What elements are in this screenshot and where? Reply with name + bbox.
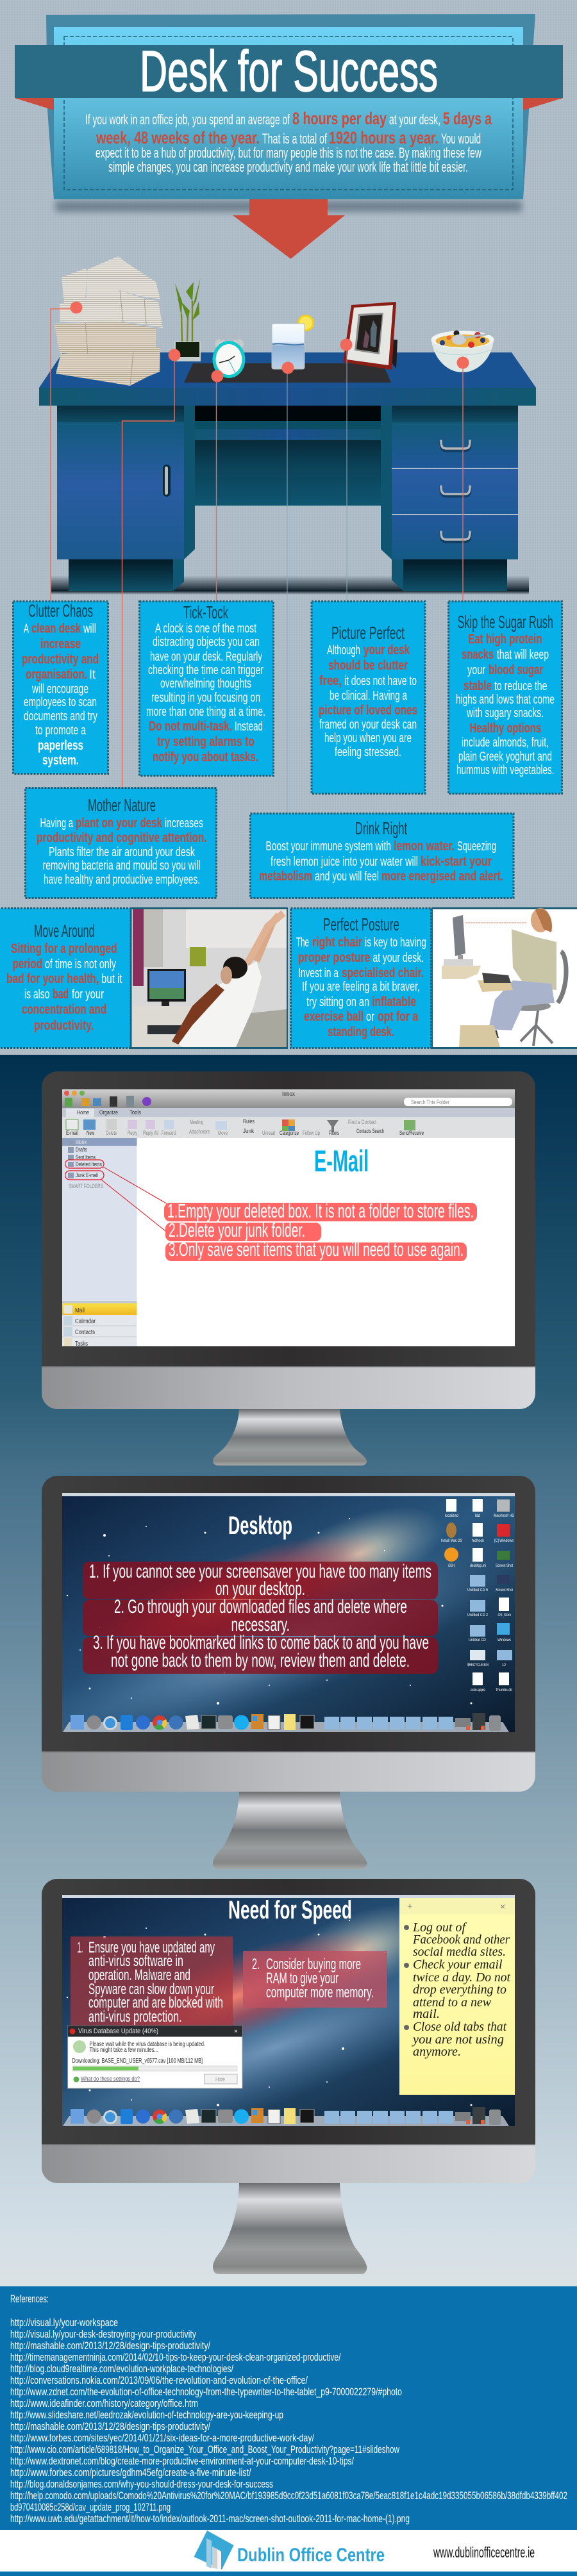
panel: Drink Right — [250, 814, 514, 898]
desktop icons: .DS_Store — [498, 1614, 511, 1617]
body: It — [89, 668, 96, 682]
reference list: http://www.cio.com/article/689818/How_to_Organize_Your_Office_and_Boost_Your_Productivity?page=11#slideshow — [10, 2443, 399, 2456]
panel: Perfect Posture — [291, 909, 431, 1048]
desk — [39, 352, 536, 595]
body: more than one thing at a time. — [146, 705, 265, 719]
desktop icons — [441, 1499, 515, 1692]
glass of lemon water — [272, 315, 314, 369]
section title: E-Mail — [314, 1144, 369, 1178]
body: The — [296, 936, 309, 950]
body: metabolism — [259, 869, 312, 884]
body: framed on your desk can — [319, 718, 417, 732]
sticky note: mail. — [413, 2007, 440, 2021]
desk mat — [184, 363, 391, 383]
monitor: email — [42, 1071, 535, 1466]
virus update dialog: Downloading: BASE_END_USER_v6577.cav [100 MB/112 MB] — [72, 2058, 203, 2065]
body: system. — [42, 753, 79, 768]
body — [37, 816, 207, 887]
tip 1: computer and are blocked with — [88, 1994, 223, 2011]
desktop icons: Macintosh HD — [494, 1514, 515, 1518]
tip 3 — [83, 1632, 438, 1674]
tip 1: on your desktop. — [215, 1578, 305, 1599]
centre recess — [184, 406, 391, 506]
body: Eat high protein — [468, 632, 542, 647]
company name: Dublin Office Centre — [237, 2545, 385, 2566]
body: it does not have to — [344, 674, 417, 688]
body: Boost your immune system with — [265, 839, 391, 854]
desktop icons: Install Mac OS — [441, 1539, 462, 1543]
body: Sitting for a prolonged — [11, 941, 117, 956]
ribbon: Reply — [128, 1130, 137, 1136]
ribbon: New — [87, 1130, 94, 1136]
body: blood sugar — [489, 663, 543, 677]
desktop screen — [62, 1895, 515, 2126]
tip 2 — [83, 1596, 438, 1636]
ribbon: Filters — [329, 1130, 339, 1136]
body: lemon water. — [394, 839, 455, 854]
body: be clinical. Having a — [330, 689, 408, 703]
tip 2: computer more memory. — [266, 1984, 374, 2001]
ribbon: Follow Up — [303, 1130, 320, 1136]
body: If you are feeling a bit braver, — [302, 980, 420, 994]
ribbon — [62, 1117, 515, 1138]
body: A clock is one of the most — [155, 622, 256, 636]
panel: Picture Perfect — [312, 601, 425, 793]
red highlight ovals — [65, 1160, 104, 1180]
tabs: Organize — [99, 1109, 118, 1116]
heading: Mother Nature — [88, 795, 156, 815]
arrow — [233, 199, 345, 259]
section title: Desktop — [228, 1512, 292, 1540]
tip 1: Ensure you have updated any — [88, 1939, 215, 1956]
marker dots — [71, 301, 469, 382]
body: have healthy and productive employees. — [44, 873, 200, 887]
body: organisation. — [26, 667, 87, 682]
body: employees to scan — [24, 695, 97, 709]
sticky note: you are not using — [412, 2033, 504, 2047]
body: resulting in you focusing on — [151, 691, 260, 705]
reference list: http://timemanagementninja.com/2014/02/10-tips-to-keep-your-desk-clean-organized-productive/ — [10, 2351, 341, 2363]
body: notify you about tasks. — [153, 750, 258, 764]
ribbon: Send/Receive — [399, 1130, 424, 1136]
right pedestal — [381, 406, 518, 559]
title: Desk for Success — [140, 40, 438, 104]
sticky note: twice a day. Do not — [413, 1970, 510, 1985]
body: should be clutter — [328, 658, 408, 673]
reference list: http://www.uwb.edu/getattachment/it/how-to/index/outlook-2011-mac/screen-shot-outlook-2011-for-mac-home-(1).png — [10, 2513, 410, 2525]
desktop icons: hidhook — [472, 1539, 485, 1543]
ribbon: Reply All — [143, 1130, 158, 1136]
heading: Move Around — [34, 921, 95, 941]
sticky note: anymore. — [413, 2045, 461, 2059]
body: right chair — [312, 935, 362, 950]
reference list: http://www.forbes.com/sites/yec/2014/01/21/six-ideas-for-a-more-productive-work-day/ — [10, 2432, 314, 2444]
body: distracting objects you can — [153, 635, 260, 649]
body: opt for a — [378, 1009, 418, 1024]
body — [259, 839, 503, 884]
body: snacks — [462, 647, 494, 662]
body: plant on your desk — [76, 816, 162, 830]
window title bar: Inbox — [282, 1091, 295, 1097]
body — [296, 935, 426, 1039]
tip 1 — [71, 1936, 233, 2026]
sidebar: Contacts — [75, 1329, 95, 1336]
sidebar: Junk E-mail — [76, 1172, 98, 1178]
left pedestal — [57, 406, 195, 559]
cereal bowl — [431, 331, 508, 372]
body — [6, 941, 122, 1033]
sidebar: Calendar — [75, 1318, 96, 1325]
window title bar: Search This Folder — [411, 1099, 449, 1105]
body: productivity and cognitive attention. — [37, 830, 207, 845]
outlook screen — [62, 1089, 515, 1348]
dock — [63, 1713, 509, 1732]
sticky note: Check your email — [413, 1958, 503, 1972]
heading: Tick-Tock — [183, 602, 229, 622]
body: your desk — [364, 643, 410, 657]
body: try setting alarms to — [157, 734, 255, 749]
leader lines — [51, 309, 463, 813]
tip 1: 1. — [77, 1939, 83, 1956]
intro text: 5 days a — [443, 109, 492, 128]
body: will encourage — [31, 682, 88, 697]
keyboard and footrest — [459, 973, 513, 1047]
desktop icons: .com.apple — [470, 1688, 486, 1692]
tabs: Home — [77, 1109, 89, 1116]
sidebar: SMART FOLDERS — [69, 1183, 103, 1189]
tip 1: anti-virus protection. — [88, 2008, 182, 2026]
ribbon: Categorize — [280, 1130, 299, 1136]
virus update dialog: Please wait while the virus database is being updated. — [90, 2041, 205, 2048]
tip 2: 2. — [252, 1956, 260, 1973]
ribbon: Contacts Search — [356, 1128, 384, 1134]
body: increase — [40, 637, 81, 652]
ribbon: E-mail — [66, 1130, 78, 1136]
chair — [508, 952, 566, 1046]
ribbon: Move — [218, 1130, 228, 1136]
desktop icons: Untitled CD — [469, 1639, 487, 1642]
panel shadow — [55, 201, 522, 212]
body: will — [83, 622, 96, 636]
panel: Tick-Tock — [140, 601, 273, 775]
body: more energised and alert. — [381, 869, 503, 884]
body: stable — [464, 679, 492, 693]
tip 2: Consider buying more — [266, 1956, 361, 1973]
ribbon: Unread — [262, 1130, 275, 1136]
footer — [0, 2530, 577, 2576]
body: removing bacteria and mould so you will — [43, 859, 201, 873]
body: picture of loved ones — [319, 703, 417, 718]
desktop icons: Untitled CD 5 — [467, 1589, 489, 1592]
reference list: http://www.ideafinder.com/history/category/office.htm — [10, 2397, 198, 2409]
tip 2 — [243, 1951, 387, 2008]
reference list: http://www.dextronet.com/blog/create-more-productive-environment-at-your-computer-desk-10-tips/ — [10, 2455, 354, 2467]
reference list: http://mashable.com/2013/12/28/design-tips-productivity/ — [10, 2420, 210, 2432]
desktop icons: Screen Shot — [496, 1564, 513, 1568]
body: that will keep — [497, 648, 549, 662]
heading: Perfect Posture — [323, 914, 399, 934]
body: try sitting on an — [306, 995, 369, 1009]
ribbon: Rules — [243, 1118, 255, 1125]
intro text: week, 48 weeks of the year. — [96, 128, 260, 147]
reference list: http://blog.donaldsonjames.com/why-you-should-dress-your-desk-for-success — [10, 2478, 273, 2490]
sidebar: Sent Items — [76, 1154, 96, 1160]
references heading: References: — [10, 2293, 49, 2305]
plant — [174, 277, 201, 361]
sticky note: Facebook and other — [412, 1933, 510, 1947]
reference list: http://www.forbes.com/pictures/gdhm45efg/create-a-five-minute-list/ — [10, 2466, 251, 2479]
tip 3: not gone back to them by now, review them and delete. — [111, 1650, 410, 1671]
body: standing desk. — [328, 1025, 394, 1039]
tip 2: 2. Go through your downloaded files and delete where — [114, 1596, 407, 1617]
body: free, — [319, 673, 342, 688]
legs — [69, 559, 507, 591]
drawer handles — [441, 441, 470, 541]
tip 2: 2.Delete your junk folder. — [169, 1219, 305, 1241]
tabs: Tools — [130, 1109, 141, 1116]
reference list: http://conversations.nokia.com/2013/09/06/the-revolution-and-evolution-of-the-office/ — [10, 2374, 308, 2386]
sidebar: Deleted Items — [76, 1161, 102, 1168]
body: but it — [101, 972, 122, 986]
desktop icons: Screen Shot — [496, 1589, 513, 1592]
heading: Clutter Chaos — [28, 601, 93, 621]
illustration: correct sitting posture — [431, 907, 577, 1049]
section title: Need for Speed — [228, 1896, 352, 1924]
panel: Move Around — [0, 909, 131, 1048]
body: bad for your health, — [6, 971, 99, 986]
body: exercise ball — [304, 1009, 364, 1024]
reference list: http://visual.ly/your-desk-destroying-your-productivity — [10, 2328, 196, 2340]
heading: Picture Perfect — [331, 623, 405, 643]
desktop icons: Untitled CD 2 — [467, 1614, 489, 1617]
body: paperless — [38, 738, 83, 753]
person — [476, 908, 556, 1047]
body: your — [467, 663, 485, 677]
virus update dialog: Virus Database Update (40%) — [78, 2027, 158, 2035]
desktop screen — [62, 1493, 515, 1732]
body: have on your desk. Regularly — [150, 650, 262, 664]
panel: Skip the Sugar Rush — [449, 601, 562, 793]
tip 2: RAM to give your — [266, 1970, 339, 1987]
header panel — [15, 14, 563, 212]
reference list: http://visual.ly/your-workspace — [10, 2316, 118, 2329]
body: of time is not only — [45, 957, 116, 971]
tip 1: operation. Malware and — [88, 1967, 190, 1984]
sidebar: Tasks — [75, 1341, 88, 1348]
sticky note: social media sites. — [413, 1945, 506, 1959]
sidebar — [62, 1138, 137, 1348]
reference list: http://mashable.com/2013/12/28/design-tips-productivity/ — [10, 2340, 210, 2352]
logo — [194, 2531, 233, 2570]
intro text — [85, 109, 492, 175]
sticky note: + — [407, 1901, 413, 1912]
picture frame — [343, 302, 397, 370]
window title bar — [62, 1089, 515, 1108]
ribbon: Attachment — [189, 1128, 210, 1135]
body: specialised chair. — [342, 966, 424, 980]
desktop surface — [39, 352, 536, 388]
body: checking the time can trigger — [148, 663, 263, 677]
panel: Clutter Chaos — [13, 601, 108, 774]
body: period — [13, 957, 42, 971]
man — [172, 913, 283, 1047]
body: kick-start your — [421, 854, 492, 869]
section background: computer tips — [0, 1055, 577, 2286]
tip 2: necessary. — [231, 1614, 290, 1635]
desktop icons: ldd — [475, 1514, 480, 1518]
sticky note: drop everything to — [413, 1983, 506, 1997]
intro text: If you work in an office job, you spend an average of — [85, 111, 290, 128]
connector lines — [101, 1167, 169, 1234]
paper stack — [54, 256, 163, 386]
sticky note — [399, 1898, 515, 2095]
body: Do not multi-task. — [149, 719, 232, 734]
body: A — [24, 622, 29, 636]
computer — [442, 915, 481, 979]
photo: man stretching at desk — [130, 907, 288, 1049]
body: overwhelming thoughts — [160, 677, 251, 691]
body: proper posture — [298, 950, 371, 965]
virus update dialog — [68, 2026, 242, 2088]
desktop icons: 12 — [502, 1664, 506, 1667]
body: increases — [165, 816, 203, 830]
sticky note: Log out of — [412, 1920, 467, 1935]
body — [456, 632, 555, 777]
sidebar: Inbox — [76, 1139, 87, 1145]
body: help you when you are — [324, 731, 412, 745]
sticky note: Close old tabs that — [413, 2020, 506, 2034]
body: with sugary snacks. — [466, 706, 544, 720]
body: productivity. — [34, 1018, 94, 1033]
body: for your — [72, 987, 104, 1002]
reference list — [10, 2316, 567, 2525]
sidebar: Drafts — [76, 1146, 87, 1153]
body: Plants filter the air around your desk — [49, 845, 196, 859]
intro text: You would — [441, 131, 481, 147]
ribbon: Find a Contact — [348, 1119, 376, 1125]
reference list: http://blog.cloud9realtime.com/evolution-workplace-technologies/ — [10, 2363, 233, 2375]
tabs — [62, 1108, 515, 1117]
virus update dialog: This might take a few minutes... — [90, 2047, 158, 2054]
heading: Drink Right — [355, 818, 407, 838]
body: at your desk. — [373, 951, 424, 965]
tip 1: Spyware can slow down your — [88, 1981, 214, 1998]
tip 1: anti-virus software in — [88, 1953, 183, 1970]
desktop icons: Windows — [498, 1639, 511, 1642]
monitor in photo — [147, 969, 186, 1009]
alarm clock — [213, 335, 245, 378]
monitor: desktop — [42, 1476, 535, 1869]
ribbon: Delete — [106, 1130, 117, 1136]
intro text: 8 hours per day — [292, 109, 387, 128]
sticky note: × — [500, 1901, 505, 1911]
references panel — [0, 2286, 577, 2530]
desktop icons: [C] Windows — [494, 1539, 514, 1543]
desktop icons: desktop.ini — [470, 1564, 486, 1568]
body — [22, 622, 99, 768]
desktop icons: localized — [445, 1514, 458, 1518]
ribbon: Forward — [162, 1130, 176, 1136]
body: Invest in a — [298, 966, 339, 980]
body: is also — [24, 987, 50, 1002]
intro text: at your desk, — [389, 111, 440, 128]
title banner — [15, 45, 563, 98]
body: clean desk — [31, 622, 81, 636]
ribbon folds — [15, 98, 563, 110]
body: Squeezing — [457, 839, 496, 854]
body: to promote a — [35, 723, 87, 738]
virus update dialog: Hide — [215, 2076, 225, 2083]
door handle — [163, 465, 171, 497]
body: inflatable — [372, 995, 416, 1009]
body: is key to having — [365, 936, 426, 950]
reference list: http://www.zdnet.com/the-evolution-of-office-technology-from-the-typewriter-to-the-tablet_p9-7000022279/#photo — [10, 2386, 402, 2398]
reference list: http://www.slideshare.net/leedrozak/evolution-of-technology-are-you-keeping-up — [10, 2409, 283, 2421]
tip 1 — [83, 1561, 438, 1599]
body: Although — [327, 643, 360, 657]
body: or — [366, 1010, 374, 1024]
virus update dialog: What do these settings do? — [81, 2076, 140, 2082]
body: Having a — [40, 816, 74, 830]
sidebar: Mail — [75, 1307, 85, 1314]
desktop icons: Thumbs.db — [496, 1688, 513, 1692]
virus update dialog: × — [234, 2028, 238, 2035]
body — [319, 643, 417, 759]
body: Healthy options — [469, 721, 541, 736]
body: concentration and — [22, 1002, 106, 1017]
ribbon: Junk — [243, 1128, 254, 1134]
ribbon: Meeting — [190, 1119, 203, 1125]
body: fresh lemon juice into your water will — [271, 855, 418, 869]
body: bad — [53, 987, 69, 1002]
floor shadow — [51, 575, 529, 595]
body: to reduce the — [494, 679, 548, 693]
intro text: That is a total of — [262, 131, 328, 147]
body: feeling stressed. — [335, 745, 401, 759]
desktop icons: iSSH — [448, 1564, 455, 1568]
body — [146, 622, 265, 764]
desk front edge — [39, 388, 536, 406]
intro text: 1920 hours a year. — [329, 128, 439, 147]
desktop icons: $RECYCLE.BIN — [467, 1664, 489, 1667]
body: Instead — [235, 720, 263, 734]
sticky note: attend to a new — [413, 1995, 492, 2010]
body: productivity and — [22, 652, 99, 667]
panel: Mother Nature — [26, 788, 217, 898]
reference list: bd970410085c258d/cav_update_prog_102711.png — [10, 2501, 171, 2513]
body: documents and try — [24, 709, 97, 723]
body: and you will feel — [315, 870, 379, 884]
monitor: need for speed — [42, 1879, 535, 2274]
tip 2 — [165, 1219, 321, 1241]
